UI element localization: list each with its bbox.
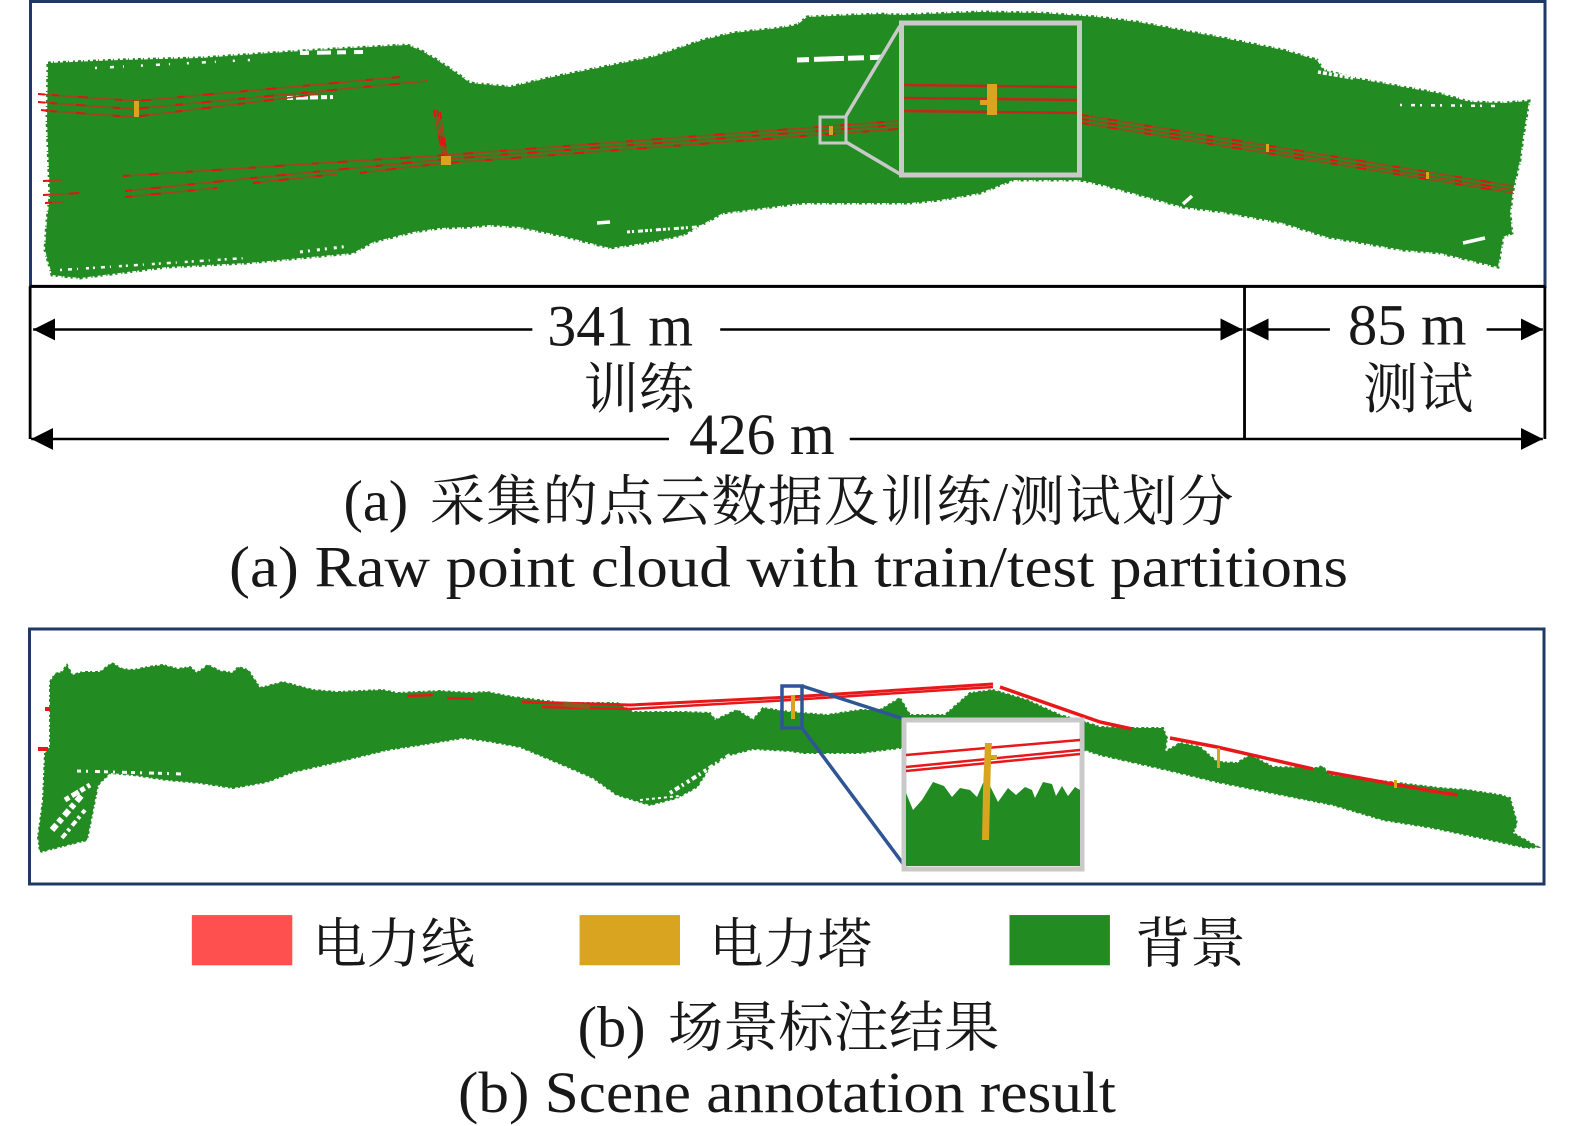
legend: background (1009, 913, 1246, 974)
panel: raw point cloud (30, 2, 1545, 286)
caption: panel a: (a) Raw point cloud with train/test partitions (229, 535, 1348, 600)
caption: panel b: (b) Scene annotation result (458, 1060, 1116, 1125)
power lines: top view (38, 77, 1513, 203)
towers: top view (134, 101, 1429, 179)
legend: tower (580, 914, 872, 974)
towers: side view (791, 695, 1397, 788)
dimension labels: 测试 (1363, 359, 1474, 420)
legend: background: 背景 (1135, 913, 1246, 974)
dimension labels: 训练 (584, 359, 696, 420)
speckles: gaps in side view cloud (52, 755, 730, 838)
legend (192, 913, 1246, 974)
power lines: side view (38, 684, 1458, 795)
caption: panel b (458, 995, 1116, 1125)
dimension labels: 85 m (1348, 293, 1467, 358)
caption: panel a: 采集的点云数据及训练/测试划分 (430, 471, 1233, 532)
legend: power line: 电力线 (312, 914, 475, 974)
caption: panel b: (b) (578, 995, 645, 1060)
legend: power line (192, 914, 475, 974)
caption: panel a (229, 468, 1348, 600)
zoom callout: top view (820, 23, 1080, 175)
caption: panel a: (a) (344, 468, 408, 533)
dimension labels: 341 m (547, 294, 693, 359)
point cloud: side view (38, 663, 1538, 852)
legend: tower: 电力塔 (709, 914, 872, 974)
dimension labels: 426 m (689, 402, 835, 467)
panel: scene annotation (30, 629, 1544, 884)
arrows: dimension lines (31, 329, 1543, 439)
caption: panel b: 场景标注结果 (668, 998, 999, 1059)
point cloud: top view (45, 12, 1529, 278)
dimension labels (547, 293, 1474, 467)
speckles: gaps in top view cloud (60, 52, 1500, 270)
zoom callout: side view (782, 686, 1082, 869)
panel: dimension annotations (30, 286, 1545, 467)
